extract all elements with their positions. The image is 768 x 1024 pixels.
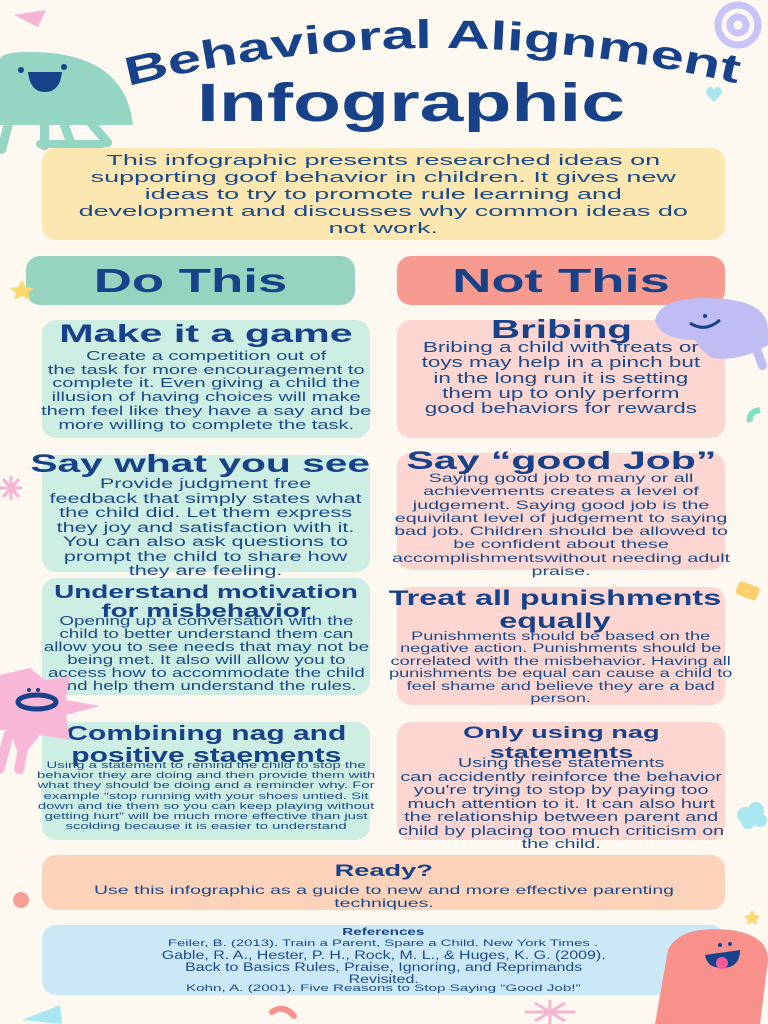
icon: pink star mascot <box>0 668 100 775</box>
card: Understand motivation: Understand motivation <box>54 582 358 602</box>
icon: star yellow <box>10 280 34 300</box>
intro box <box>42 148 725 240</box>
card: Combining nag and positive <box>42 722 370 840</box>
card: Combining nag and positive: Combining nag and <box>66 723 346 745</box>
card: Combining nag and positive: positive staements <box>71 745 341 767</box>
icon: coral arc <box>272 1009 294 1016</box>
card: Only using nag statements: child by placing too much criticism on <box>398 824 724 838</box>
card: Understand motivation: Opening up a conversation with the <box>59 614 353 628</box>
card: Only using nag statements: much attention to it. It can also hurt <box>407 796 715 810</box>
card: Understand motivation <box>42 578 370 695</box>
card: Combining nag and positive: Using a statement to remind the child to stop the <box>46 760 366 771</box>
card: Only using nag statements: can accidently reinforce the behavior <box>400 770 722 784</box>
card: Say good job: bad job. Children should be allowed to <box>394 524 728 538</box>
title: Infographic <box>197 73 625 133</box>
panel: Ready: Ready? <box>334 861 433 880</box>
panel: Ready: Use this infographic as a guide to new and more effective parenting <box>94 883 673 897</box>
card: Say what you see: they joy and satisfaction with it. <box>57 520 355 534</box>
card: Bribing: in the long run it is setting <box>434 371 688 387</box>
card: Only using nag statements: statements <box>489 743 633 762</box>
card: Treat all punishments: feel shame and believe they are a bad <box>407 681 715 693</box>
card: Treat all punishments: punishments be equal can cause a child to <box>389 668 733 680</box>
card: Say good job: Saying good job to many or all <box>429 471 693 485</box>
intro box: not work. <box>329 220 438 237</box>
card: Say what you see: they are feeling. <box>129 563 283 578</box>
card: Combining nag and positive: example “stop running with your shoes untied. Sit <box>44 791 368 802</box>
title <box>126 19 741 133</box>
panel: Ready <box>42 855 725 910</box>
card: Understand motivation: for misbehavior <box>101 601 311 621</box>
card: Only using nag statements: you're trying to stop by paying too <box>414 783 708 797</box>
panel: Ready: techniques. <box>334 896 433 910</box>
card: Bribing: them up to only perform <box>442 386 680 402</box>
card: Only using nag statements <box>397 722 725 840</box>
icon: pink asterisk bottom <box>525 1000 575 1024</box>
card: Bribing <box>397 320 725 438</box>
card: Combining nag and positive: behavior they are doing and then provide them with <box>37 770 375 781</box>
title: Behavioral Alignment <box>126 19 741 85</box>
intro box: supporting goof behavior in children. It gives new <box>91 169 676 186</box>
card: Treat all punishments <box>397 587 725 705</box>
heading: Not This: Not This <box>452 262 670 299</box>
heading: Do This: Do This <box>94 262 287 299</box>
text: the child. <box>521 837 601 851</box>
card: Make it a game <box>42 320 370 438</box>
card: Understand motivation: child to better understand them can <box>59 627 353 641</box>
card: Treat all punishments: equally <box>499 610 611 633</box>
card: Understand motivation: access how to accommodate the child <box>48 666 364 680</box>
icon: coral dot <box>13 892 29 908</box>
text: praise. <box>531 564 591 578</box>
card: Say good job: be confident about these <box>453 537 669 551</box>
card: Make it a game: Create a competition out of <box>86 349 326 363</box>
icon: teal hook <box>750 410 760 422</box>
intro box: ideas to try to promote rule learning and <box>145 186 622 203</box>
card: Make it a game: complete it. Even giving a child the <box>52 376 360 390</box>
card: Say what you see <box>42 455 370 572</box>
card: Bribing: good behaviors for rewards <box>425 401 697 417</box>
card: Say good job: achievements creates a level of <box>423 484 699 498</box>
icon: purple blob mascot <box>655 298 768 371</box>
card: Say what you see: You can also ask questions to <box>63 534 348 549</box>
card: Say what you see: the child did. Let them express <box>60 505 352 520</box>
card: Only using nag statements: Only using nag <box>463 723 659 742</box>
card: Say good job: Say “good Job” <box>406 447 716 475</box>
card: Say what you see: prompt the child to share how <box>64 548 348 564</box>
icon: coral ghost mascot <box>655 929 768 1024</box>
panel: References: Kohn, A. (2001). Five Reasons to Stop Saying “Good Job!” <box>186 983 581 994</box>
card: Bribing: Bribing <box>490 314 632 344</box>
card: Make it a game: them feel like they have a say and be <box>41 404 371 418</box>
icon: cyan heart <box>706 87 722 102</box>
card: Say good job <box>397 453 725 570</box>
card: Make it a game: the task for more encouragement to <box>48 363 364 377</box>
card: Say good job: judgement. Saying good job is the <box>413 498 709 512</box>
card: Understand motivation: and help them understand the rules. <box>56 679 356 693</box>
icon: yellow square <box>735 581 760 601</box>
panel: References: Feiler, B. (2013). Train a Parent, Spare a Child. New York Times . <box>168 938 599 949</box>
icon: yellow small star <box>744 910 760 925</box>
card: Understand motivation: allow you to see needs that may not be <box>43 640 369 654</box>
heading: Do This <box>26 256 355 305</box>
card: Combining nag and positive: down and tie them so you can keep playing without <box>38 801 374 812</box>
card: Make it a game: more willing to complete the task. <box>58 418 354 432</box>
card: Say good job: equivilant level of judgement to saying <box>395 511 727 525</box>
panel: References: Back to Basics Rules, Praise, Ignoring, and Reprimands <box>185 962 582 974</box>
card: Say what you see: Say what you see <box>30 450 370 478</box>
panel: References: Revisited. <box>348 974 419 986</box>
card: Treat all punishments: correlated with the misbehavior. Having all <box>391 656 731 668</box>
card: Bribing: Bribing a child with treats or <box>423 340 699 356</box>
card: Combining nag and positive: scolding because it is easier to understand <box>65 821 347 832</box>
card: Combining nag and positive: what they should be doing and a reminder why. For <box>37 780 374 791</box>
card: Only using nag statements: the relationship between parent and <box>404 810 718 824</box>
card: Understand motivation: being met. It also will allow you to <box>67 653 345 667</box>
card: Combining nag and positive: getting hurt” will be much more effective than just <box>45 811 367 822</box>
card: Treat all punishments: Treat all punishments <box>389 587 721 610</box>
icon: pink asterisk <box>0 476 22 500</box>
card: Make it a game: illusion of having choices will make <box>51 390 361 404</box>
icon: pink triangle <box>14 10 46 27</box>
card: Treat all punishments: person. <box>531 693 591 705</box>
icon: teal jellyfish mascot <box>0 52 133 155</box>
card: Treat all punishments: Punishments should be based on the <box>411 631 711 643</box>
panel: References: Gable, R. A., Hester, P. H., Rock, M. L., & Huges, K. G. (2009). <box>162 950 605 962</box>
card: Say what you see: feedback that simply states what <box>50 490 362 506</box>
icon: cyan cloud <box>737 802 767 829</box>
card: Make it a game: Make it a game <box>59 320 353 348</box>
intro box: development and discusses why common ideas do <box>79 203 688 220</box>
icon: cyan triangle <box>22 1005 62 1024</box>
card: Say what you see: Provide judgment free <box>100 476 312 491</box>
panel: References <box>42 925 725 995</box>
panel: References: References <box>342 926 425 938</box>
card: Bribing: toys may help in a pinch but <box>422 355 700 371</box>
icon: purple spiral <box>718 5 758 45</box>
card: Treat all punishments: negative action. Punishments should be <box>400 643 722 655</box>
card: Say good job: accomplishmentswithout needing adult <box>392 551 730 565</box>
intro box: This infographic presents researched ideas on <box>107 152 660 169</box>
heading: Not This <box>397 256 725 305</box>
card: Only using nag statements: Using these statements <box>458 756 664 770</box>
